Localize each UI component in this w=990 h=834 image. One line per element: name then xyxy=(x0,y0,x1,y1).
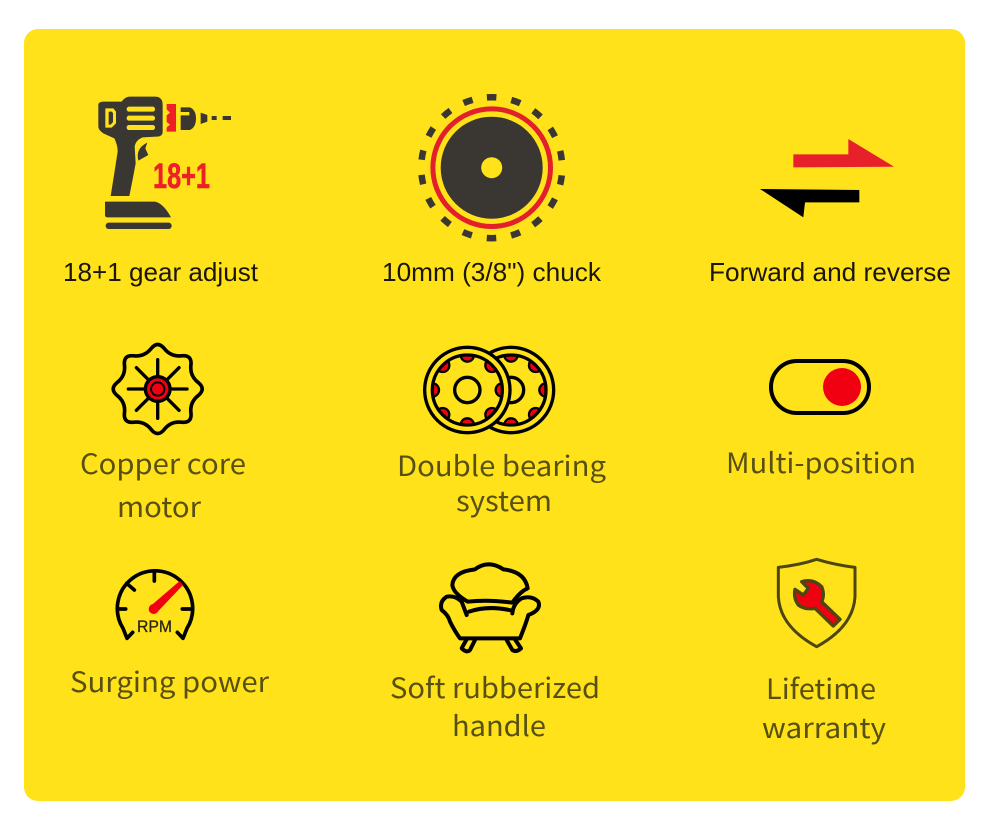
feature: soft rubberized handle xyxy=(390,564,600,745)
gauge text: RPM xyxy=(137,617,172,636)
feature: surging power xyxy=(70,571,269,701)
icon: armchair xyxy=(441,564,539,651)
label: Forward and reverse xyxy=(709,257,951,287)
feature: copper core motor xyxy=(80,345,246,526)
icon: RPM gauge xyxy=(117,571,193,638)
label: 10mm (3/8") chuck xyxy=(382,257,602,287)
feature: 10mm chuck xyxy=(382,93,602,287)
label: Copper core xyxy=(80,443,246,483)
front bearing xyxy=(425,347,510,433)
icon: chuck xyxy=(417,93,567,243)
label: Double bearing xyxy=(397,445,606,485)
label: Lifetime xyxy=(766,668,876,708)
back bearing xyxy=(468,347,554,433)
label: 18+1 gear adjust xyxy=(63,257,259,287)
label: Surging power xyxy=(70,661,269,701)
icon: shield with wrench xyxy=(778,559,855,647)
label line 2: warranty xyxy=(762,707,886,747)
icon label: 18+1: 18+1 xyxy=(153,157,210,196)
feature: lifetime warranty xyxy=(762,559,886,747)
label: Multi-position xyxy=(726,442,916,482)
label line 2: system xyxy=(456,480,552,520)
feature: multi-position xyxy=(726,361,916,482)
icon: bearings xyxy=(425,347,554,433)
icon: arrows xyxy=(760,139,894,217)
feature: forward and reverse xyxy=(709,139,951,287)
label line 2: handle xyxy=(452,705,546,745)
label line 2: motor xyxy=(117,486,201,526)
icon: drill xyxy=(98,97,231,229)
icon: motor xyxy=(113,345,202,433)
label: Soft rubberized xyxy=(390,667,600,707)
feature: double bearing system xyxy=(397,347,606,520)
feature: 18+1 gear adjust xyxy=(63,97,259,287)
icon: toggle xyxy=(771,361,869,413)
